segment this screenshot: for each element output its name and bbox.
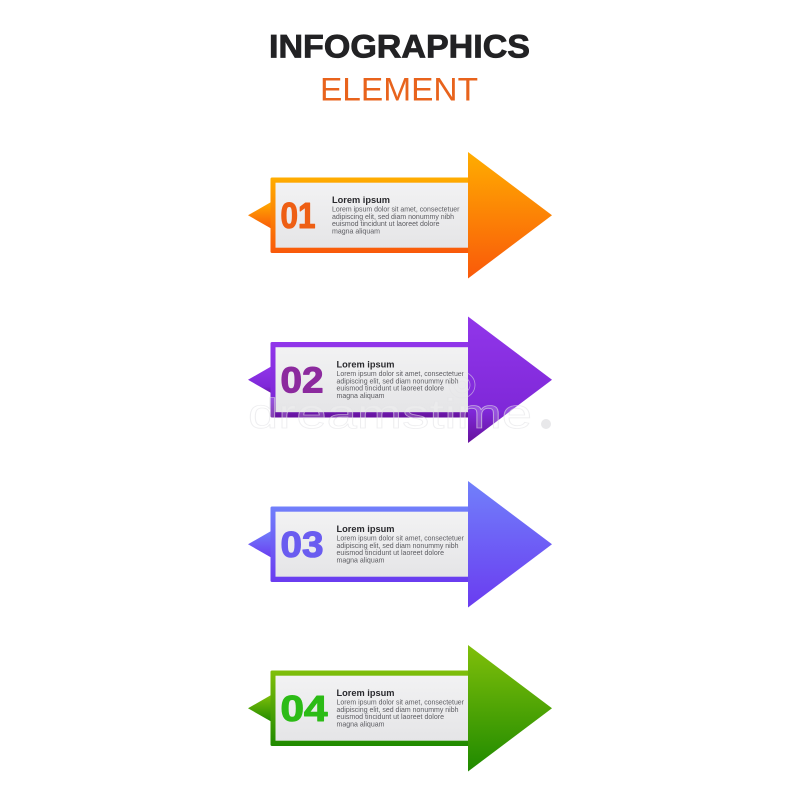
body text: Lorem ipsum dolor sit amet, consectetuer	[336, 369, 465, 378]
left tip	[248, 530, 272, 558]
heading: Lorem ipsum	[332, 194, 390, 205]
watermark dot	[541, 419, 551, 429]
body text	[332, 204, 460, 235]
arrow 04	[248, 645, 552, 772]
watermark	[248, 372, 551, 437]
number: 03	[280, 524, 324, 565]
arrow 03	[248, 481, 552, 608]
body text: magna aliquam	[336, 391, 384, 400]
body text: adipiscing elit, sed diam nonummy nibh	[332, 212, 454, 221]
frame	[270, 342, 470, 418]
body text: euismod tincidunt ut laoreet dolore	[332, 219, 440, 228]
text panel	[276, 347, 468, 412]
left tip	[248, 694, 272, 722]
number: 02	[280, 360, 324, 400]
watermark logo	[449, 372, 475, 398]
arrow 01	[248, 152, 552, 278]
body text: euismod tincidunt ut laoreet dolore	[336, 712, 444, 721]
body text: adipiscing elit, sed diam nonummy nibh	[336, 541, 458, 550]
subtitle: ELEMENT	[320, 72, 478, 108]
arrow head	[468, 152, 552, 278]
body text	[336, 534, 465, 564]
arrow head	[468, 481, 552, 608]
arrow head	[468, 316, 552, 443]
arrow 02	[248, 316, 552, 443]
text panel	[276, 183, 468, 248]
left tip	[248, 366, 272, 394]
body text: euismod tincidunt ut laoreet dolore	[336, 384, 444, 392]
arrow head	[468, 645, 552, 772]
left tip	[248, 202, 272, 229]
body text	[336, 698, 465, 728]
body text	[336, 369, 465, 400]
number: 04	[280, 688, 328, 729]
body text: adipiscing elit, sed diam nonummy nibh	[336, 705, 458, 714]
number: 01	[280, 195, 316, 236]
frame	[270, 670, 470, 746]
body text: magna aliquam	[336, 555, 384, 564]
body text: adipiscing elit, sed diam nonummy nibh	[336, 376, 458, 385]
frame	[270, 178, 470, 253]
body text: Lorem ipsum dolor sit amet, consectetuer	[336, 698, 465, 706]
body text: magna aliquam	[332, 226, 380, 235]
heading: Lorem ipsum	[336, 523, 394, 534]
body text: magna aliquam	[336, 719, 384, 728]
body text: euismod tincidunt ut laoreet dolore	[336, 548, 444, 557]
watermark wordmark: dreamstime	[248, 390, 532, 437]
body text: Lorem ipsum dolor sit amet, consectetuer	[336, 534, 465, 542]
text panel	[276, 676, 468, 741]
title: INFOGRAPHICS	[269, 28, 530, 64]
text panel	[276, 512, 468, 577]
heading: Lorem ipsum	[336, 687, 394, 698]
body text: Lorem ipsum dolor sit amet, consectetuer	[332, 204, 460, 214]
frame	[270, 506, 470, 582]
heading: Lorem ipsum	[336, 358, 394, 370]
